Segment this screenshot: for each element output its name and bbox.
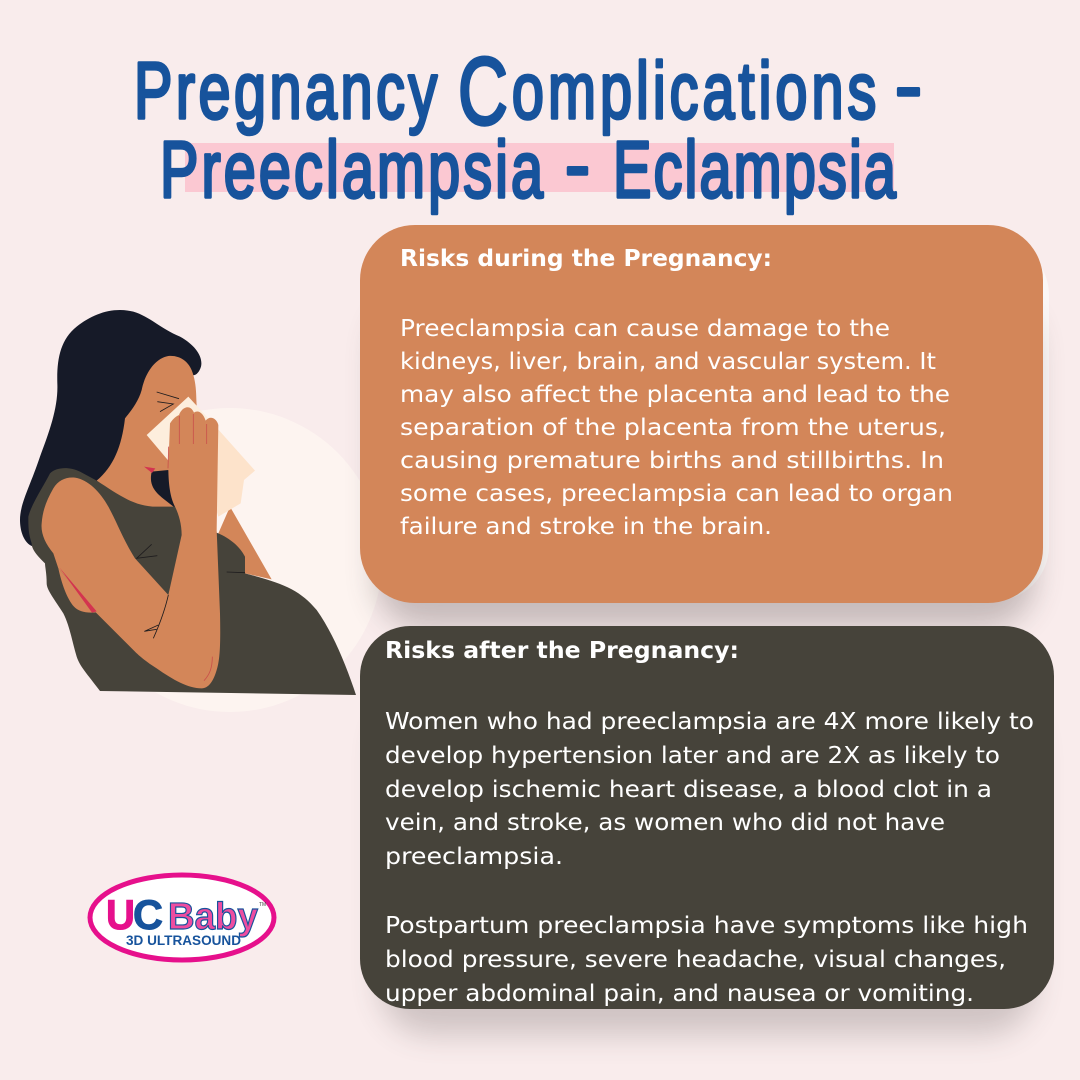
panel: risks after the pregnancy: upper abdominal pain, and nausea or vomiting. xyxy=(385,979,974,1007)
panel: risks after the pregnancy: preeclampsia. xyxy=(385,842,563,870)
dress xyxy=(28,468,356,695)
arm and hand xyxy=(42,407,220,688)
panel: risks during the pregnancy: kidneys, liver, brain, and vascular system. It xyxy=(400,347,936,375)
logo: UC Baby 3D Ultrasound: Baby xyxy=(168,896,258,938)
orange panel shadow xyxy=(375,300,1035,628)
illustration: pregnant woman with tissue xyxy=(20,310,356,695)
panel: risks during the pregnancy: separation of the placenta from the uterus, xyxy=(400,413,946,441)
finger lines xyxy=(168,414,212,681)
title: Pregnancy xyxy=(134,46,437,135)
mouth xyxy=(144,467,155,473)
tissue xyxy=(200,418,255,517)
panel: risks after the pregnancy: Postpartum preeclampsia have symptoms like high xyxy=(385,911,1028,939)
title: - xyxy=(895,41,922,130)
back arm xyxy=(218,507,272,579)
title: Preeclampsia xyxy=(160,125,543,214)
panel: white backing of orange card xyxy=(380,240,1049,601)
decorative circle behind figure xyxy=(78,408,382,712)
panel: risks during the pregnancy xyxy=(360,225,1043,603)
title: omplications xyxy=(512,46,876,135)
panel: risks during the pregnancy: Preeclampsia can cause damage to the xyxy=(400,314,890,342)
hair under chin xyxy=(151,470,176,508)
title xyxy=(134,37,922,214)
panel: risks after the pregnancy: vein, and stroke, as women who did not have xyxy=(385,808,945,836)
dark panel shadow xyxy=(380,700,1035,1035)
panel: risks after the pregnancy xyxy=(360,626,1054,1009)
title: Eclampsia xyxy=(613,125,896,214)
eye lines and arm creases xyxy=(137,392,245,638)
panel: risks during the pregnancy: may also affect the placenta and lead to the xyxy=(400,380,950,408)
panel: risks after the pregnancy: Risks after the Pregnancy: xyxy=(385,638,739,664)
logo: UC Baby 3D Ultrasound xyxy=(90,875,274,960)
panel: risks after the pregnancy: blood pressure, severe headache, visual changes, xyxy=(385,945,1006,973)
logo: UC Baby 3D Ultrasound: C xyxy=(133,891,163,938)
logo: UC Baby 3D Ultrasound: 3D ULTRASOUND xyxy=(126,933,241,948)
panel: risks during the pregnancy: Risks during the Pregnancy: xyxy=(400,246,772,272)
panel: risks during the pregnancy: causing premature births and stillbirths. In xyxy=(400,446,944,474)
logo: UC Baby 3D Ultrasound: TM xyxy=(259,902,266,908)
panel: risks during the pregnancy: failure and stroke in the brain. xyxy=(400,512,772,540)
panel: risks after the pregnancy: Women who had preeclampsia are 4X more likely to xyxy=(385,707,1034,735)
title: - xyxy=(565,120,590,209)
hair xyxy=(20,310,201,547)
red line on underarm xyxy=(59,567,97,613)
title: C xyxy=(458,37,508,145)
panel: risks during the pregnancy: some cases, preeclampsia can lead to organ xyxy=(400,479,953,507)
panel: risks after the pregnancy: develop hypertension later and are 2X as likely to xyxy=(385,741,1000,769)
logo: UC Baby 3D Ultrasound: U xyxy=(106,891,135,938)
underarm xyxy=(58,568,96,613)
panel: risks after the pregnancy: develop ischemic heart disease, a blood clot in a xyxy=(385,775,992,803)
face and neck xyxy=(97,356,197,508)
